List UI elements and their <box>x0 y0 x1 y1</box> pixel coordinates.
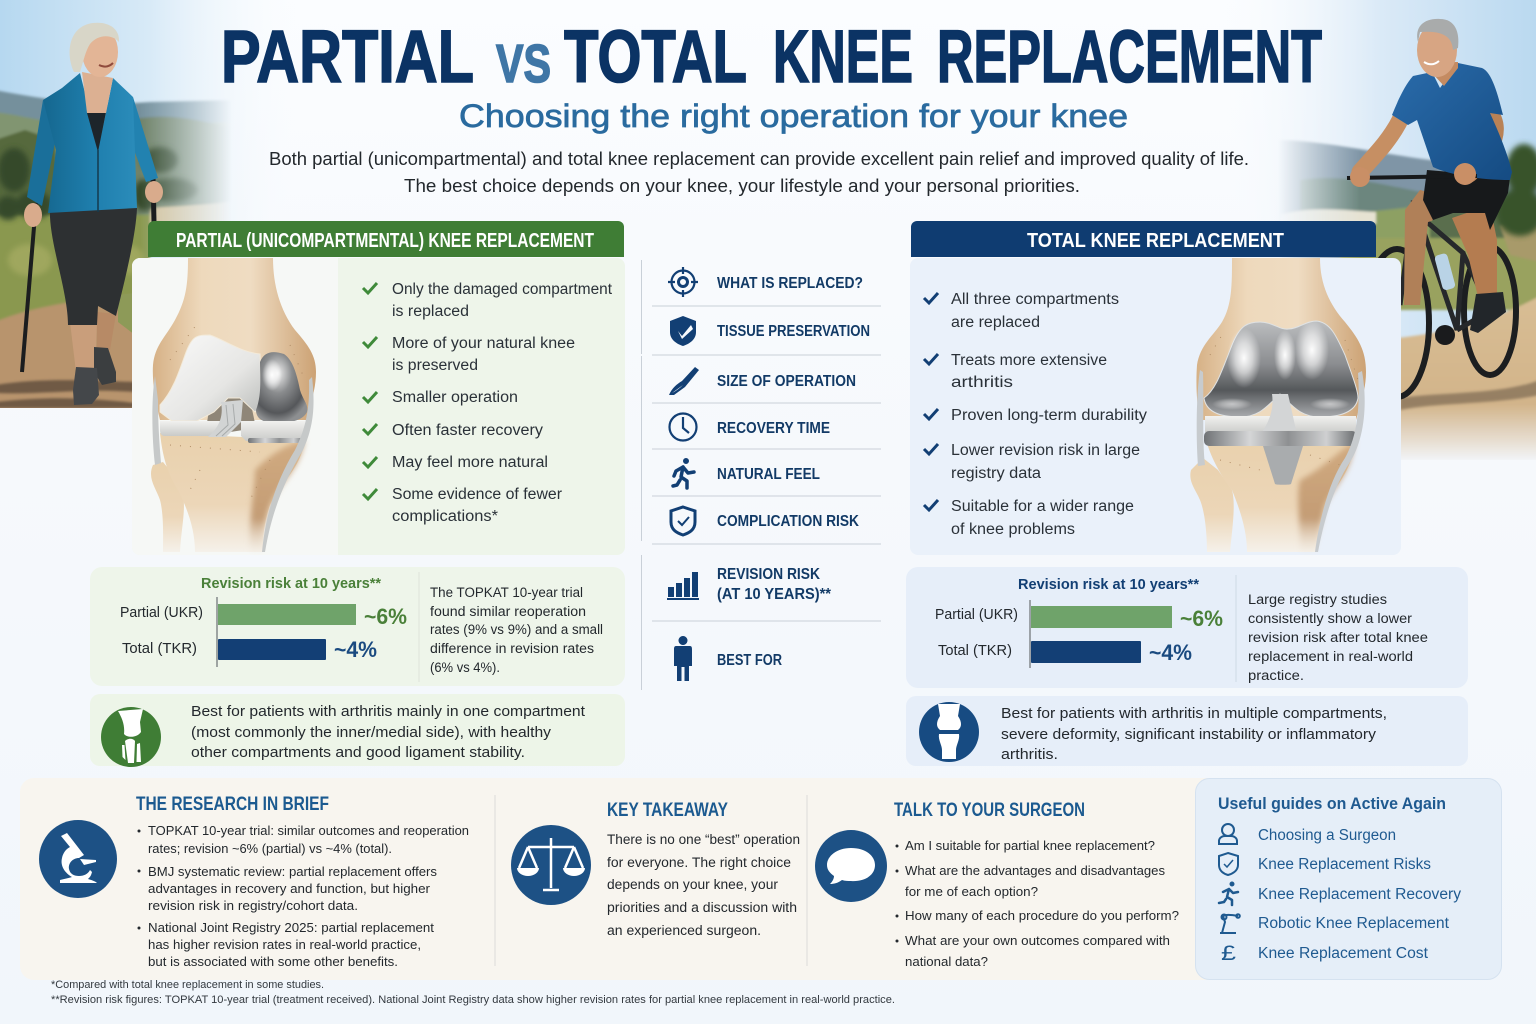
partial header: PARTIAL (UNICOMPARTMENTAL) KNEE REPLACEMENT <box>176 230 594 252</box>
best for callout: partial: Best for patients with arthritis mainly in one compartment <box>191 703 586 720</box>
revision chart panel: partial: ~6% <box>364 604 407 629</box>
title: REPLACEMENT <box>937 15 1322 98</box>
revision chart panel: total: ~6% <box>1180 606 1223 631</box>
partial header <box>148 221 624 257</box>
icon: speech bubble <box>827 848 875 884</box>
panel: useful guides: Knee Replacement Cost <box>1258 945 1429 962</box>
section: the research in brief: BMJ systematic review: partial replacement offers <box>148 864 437 879</box>
total benefits list: Lower revision risk in large <box>951 442 1140 459</box>
partial benefits list <box>363 281 613 525</box>
partial benefits list: Smaller operation <box>392 389 518 406</box>
title: VS <box>496 34 551 94</box>
section: the research in brief: revision risk in registry/cohort data. <box>148 898 358 913</box>
best for callout: partial <box>90 694 625 767</box>
title <box>221 15 1322 98</box>
revision chart panel: total: practice. <box>1248 668 1304 683</box>
section: key takeaway: There is no one “best” operation <box>607 832 800 847</box>
icon: bar chart <box>667 572 699 600</box>
icon: tissue shield <box>670 316 696 346</box>
total benefits list: of knee problems <box>951 521 1075 538</box>
icon: robotic arm <box>1220 914 1240 933</box>
section: key takeaway: priorities and a discussion with <box>607 900 797 915</box>
best for callout: total: arthritis. <box>1001 746 1058 763</box>
total header <box>911 221 1376 257</box>
revision chart panel: partial: difference in revision rates <box>430 641 594 656</box>
partial benefits list: complications* <box>392 508 498 525</box>
total benefits list: Suitable for a wider range <box>951 498 1134 515</box>
section: key takeaway: depends on your knee, your <box>607 877 779 892</box>
section: the research in brief: TOPKAT 10-year trial: similar outcomes and reoperation <box>148 823 469 838</box>
icon: target <box>668 267 698 297</box>
illustration: partial knee implant <box>151 258 316 552</box>
partial benefits list: May feel more natural <box>392 454 548 471</box>
introduction text: The best choice depends on your knee, your lifestyle and your personal priorities. <box>404 175 1080 196</box>
icon: complication shield <box>671 507 695 535</box>
bar: total ~4% <box>218 639 326 660</box>
comparison categories column: COMPLICATION RISK <box>717 513 859 530</box>
revision chart panel: partial: Partial (UKR) <box>120 605 203 621</box>
comparison categories column: TISSUE PRESERVATION <box>717 323 870 340</box>
subtitle: Choosing the right operation for your knee <box>459 98 1128 134</box>
revision chart panel: partial: The TOPKAT 10-year trial <box>430 585 583 600</box>
revision chart panel: total: consistently show a lower <box>1248 611 1413 626</box>
footnotes: **Revision risk figures: TOPKAT 10-year trial (treatment received). National Joint Registry data show higher revision rates for partial knee replacement in real-world practice. <box>51 994 895 1006</box>
section: the research in brief: but is associated with some other benefits. <box>148 954 398 969</box>
bar: partial ~6% <box>1031 606 1172 628</box>
comparison categories column: REVISION RISK <box>717 566 820 583</box>
total benefits list: All three compartments <box>951 291 1119 308</box>
panel: useful guides: Knee Replacement Risks <box>1258 856 1431 873</box>
revision chart panel: partial: found similar reoperation <box>430 604 586 619</box>
revision chart panel: partial: Revision risk at 10 years** <box>201 576 381 592</box>
revision chart panel: partial <box>90 567 625 686</box>
section: the research in brief: National Joint Registry 2025: partial replacement <box>148 920 434 935</box>
title: TOTAL <box>564 15 747 98</box>
walking pole left <box>22 203 36 372</box>
title: PARTIAL <box>221 15 474 98</box>
title: KNEE <box>773 15 913 98</box>
revision chart panel: total: Large registry studies <box>1248 592 1387 607</box>
best for callout: partial: (most commonly the inner/medial side), with healthy <box>191 724 552 741</box>
section: the research in brief <box>39 794 469 969</box>
comparison categories column: BEST FOR <box>717 652 782 669</box>
total benefits list: registry data <box>951 465 1041 482</box>
partial benefits list: More of your natural knee <box>392 335 575 352</box>
icon: clock <box>670 414 696 440</box>
icon: pound sign: £ <box>1221 942 1236 965</box>
panel: useful guides <box>1196 778 1502 980</box>
revision chart panel: total: Total (TKR) <box>938 643 1012 659</box>
panel: useful guides: Knee Replacement Recovery <box>1258 886 1461 903</box>
bar: total ~4% <box>1031 641 1141 663</box>
icon: scalpel <box>669 367 699 395</box>
section: the research in brief: rates; revision ~6% (partial) vs ~4% (total). <box>148 841 392 856</box>
panel: useful guides: Robotic Knee Replacement <box>1258 915 1450 932</box>
revision chart panel: total: revision risk after total knee <box>1248 630 1428 645</box>
section: the research in brief: THE RESEARCH IN BRIEF <box>136 794 329 815</box>
revision chart panel: total <box>906 567 1468 688</box>
icon: surgeon person <box>1219 824 1237 844</box>
icon: microscope <box>60 833 97 883</box>
best for callout: total: severe deformity, significant instability or inflammatory <box>1001 726 1377 743</box>
total benefits list: Proven long-term durability <box>951 407 1147 424</box>
bottom information panel <box>20 778 1220 980</box>
section: key takeaway <box>495 795 807 966</box>
revision chart panel: total: Partial (UKR) <box>935 607 1018 623</box>
partial benefits list: Often faster recovery <box>392 422 543 439</box>
revision chart panel: partial: ~4% <box>334 637 377 662</box>
comparison categories column: NATURAL FEEL <box>717 466 820 483</box>
illustration: total knee implant <box>1190 258 1366 552</box>
panel: total knee replacement <box>910 221 1401 555</box>
section: key takeaway: an experienced surgeon. <box>607 923 761 938</box>
revision chart panel: total: ~4% <box>1149 640 1192 665</box>
total header: TOTAL KNEE REPLACEMENT <box>1027 230 1284 252</box>
section: key takeaway: KEY TAKEAWAY <box>607 800 728 821</box>
section: the research in brief: advantages in recovery and function, but higher <box>148 881 431 896</box>
revision chart panel: total: replacement in real-world <box>1248 649 1413 664</box>
bar: partial ~6% <box>218 604 356 625</box>
section: talk to your surgeon: for me of each option? <box>905 884 1038 899</box>
comparison categories column: RECOVERY TIME <box>717 420 830 437</box>
section: key takeaway: for everyone. The right choice <box>607 855 791 870</box>
partial benefits list: is replaced <box>392 303 469 320</box>
comparison categories column: (AT 10 YEARS)** <box>717 586 832 603</box>
footnotes <box>51 979 895 1006</box>
icon: recovery runner <box>1219 882 1238 905</box>
section: talk to your surgeon: Am I suitable for partial knee replacement? <box>905 838 1155 853</box>
comparison categories column <box>642 260 881 690</box>
revision chart panel: partial: Total (TKR) <box>122 641 197 657</box>
photo: woman walking on a countryside path <box>0 23 240 412</box>
icon: balance scales <box>517 838 585 890</box>
section: talk to your surgeon: What are your own outcomes compared with <box>905 933 1170 948</box>
best for callout: total: Best for patients with arthritis in multiple compartments, <box>1001 705 1387 722</box>
introduction text <box>269 148 1249 196</box>
best for callout: total <box>906 696 1468 766</box>
panel: useful guides: Useful guides on Active Again <box>1218 794 1446 813</box>
icon: partial knee <box>118 709 143 763</box>
partial benefits list: is preserved <box>392 357 478 374</box>
comparison categories column: SIZE OF OPERATION <box>717 373 856 390</box>
total benefits list: are replaced <box>951 314 1040 331</box>
total benefits list: Treats more extensive <box>951 352 1107 369</box>
section: talk to your surgeon <box>815 800 1179 969</box>
partial benefits list: Some evidence of fewer <box>392 486 562 503</box>
revision chart panel: partial: (6% vs 4%). <box>430 660 500 675</box>
icon: runner <box>673 458 694 488</box>
revision chart panel: partial: rates (9% vs 9%) and a small <box>430 622 603 637</box>
best for callout: partial: other compartments and good ligament stability. <box>191 744 525 761</box>
section: the research in brief: has higher revision rates in real-world practice, <box>148 937 421 952</box>
icon: total knee <box>937 704 961 759</box>
panel: partial knee replacement <box>132 221 625 555</box>
section: talk to your surgeon: How many of each procedure do you perform? <box>905 908 1179 923</box>
total benefits list: arthritis <box>951 374 1013 391</box>
section: talk to your surgeon: What are the advantages and disadvantages <box>905 863 1166 878</box>
total benefits list <box>924 291 1147 538</box>
section: talk to your surgeon: national data? <box>905 954 988 969</box>
introduction text: Both partial (unicompartmental) and total knee replacement can provide excellent pain relief and improved quality of life. <box>269 148 1249 169</box>
section: talk to your surgeon: TALK TO YOUR SURGEON <box>894 800 1085 821</box>
revision chart panel: total: Revision risk at 10 years** <box>1018 577 1199 593</box>
partial benefits list: Only the damaged compartment <box>392 281 613 298</box>
panel: useful guides: Choosing a Surgeon <box>1258 827 1396 844</box>
icon: person <box>674 636 692 681</box>
comparison categories column: WHAT IS REPLACED? <box>717 275 863 292</box>
icon: risks shield <box>1219 853 1238 875</box>
footnotes: *Compared with total knee replacement in some studies. <box>51 979 324 991</box>
photo: man cycling on a countryside path <box>1275 19 1536 462</box>
